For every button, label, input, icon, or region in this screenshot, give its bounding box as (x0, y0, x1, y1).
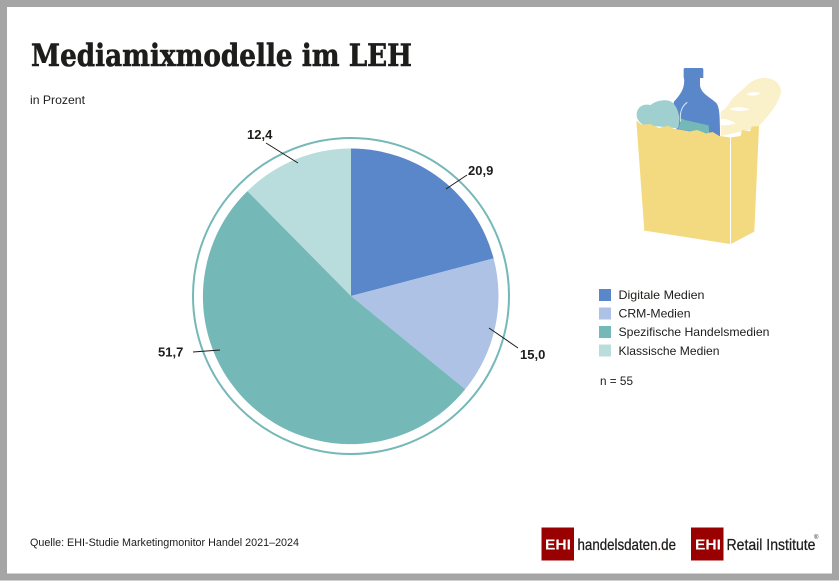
leader line 20,9 (446, 175, 467, 189)
slice: Digitale Medien 20,9 (351, 148, 494, 296)
bag side (731, 126, 759, 244)
bottle (674, 68, 720, 137)
value 51,7: 51,7 (158, 344, 183, 360)
logo mark text: EHI (695, 536, 721, 554)
vegetable (637, 100, 679, 128)
logo mark text: EHI (545, 536, 571, 554)
icon: grocery bag (636, 68, 781, 244)
bread cuts (721, 92, 761, 125)
outer ring (193, 138, 509, 454)
leader line 12,4 (266, 143, 298, 163)
slice: Spezifische Handelsmedien 51,7 (203, 191, 465, 444)
bottle label (678, 118, 709, 133)
value 12,4: 12,4 (247, 127, 273, 142)
label: Spezifische Handelsmedien: Spezifische Handelsmedien (618, 325, 770, 339)
source note: Quelle: EHI-Studie Marketingmonitor Handel 2021–2024 (30, 537, 299, 549)
bag front (636, 121, 730, 244)
value 15,0: 15,0 (520, 347, 545, 362)
subtitle: unit: in Prozent (30, 93, 86, 107)
leader line 15,0 (489, 328, 518, 348)
label: Klassische Medien: Klassische Medien (618, 344, 720, 358)
label: Digitale Medien: Digitale Medien (618, 288, 704, 302)
legend (599, 288, 770, 388)
slice: CRM-Medien 15,0 (351, 258, 498, 389)
sample size: n = 55 (600, 374, 633, 388)
logo: EHI handelsdaten.de (542, 528, 676, 560)
swatch: Digitale Medien (599, 289, 611, 301)
pie chart (158, 127, 545, 454)
swatch: Spezifische Handelsmedien (599, 326, 611, 338)
bread (721, 78, 781, 136)
label: CRM-Medien: CRM-Medien (618, 306, 690, 320)
logo wordmark: Retail Institute (726, 537, 816, 554)
title: Mediamixmodelle im LEH (31, 38, 412, 74)
logo mark (542, 528, 574, 560)
leader line 51,7 (193, 350, 220, 352)
bottle highlight (680, 102, 687, 122)
swatch: CRM-Medien (599, 308, 611, 320)
slice: Klassische Medien 12,4 (247, 148, 351, 296)
swatch: Klassische Medien (599, 344, 611, 356)
logo mark (691, 528, 724, 560)
registered mark: ® (814, 534, 819, 541)
logo: EHI Retail Institute (691, 528, 819, 560)
logo wordmark: handelsdaten.de (578, 537, 676, 554)
value 20,9: 20,9 (468, 163, 493, 178)
